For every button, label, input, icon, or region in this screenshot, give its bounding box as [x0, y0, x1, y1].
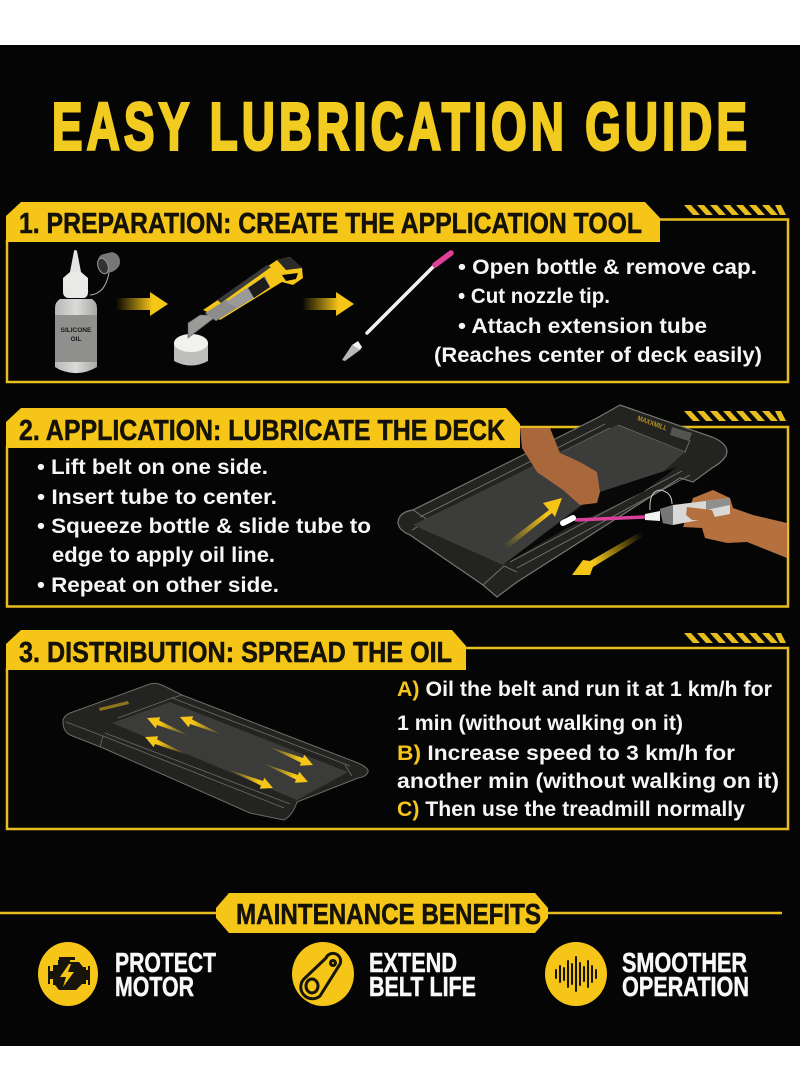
label	[369, 947, 476, 1002]
icon: belt and rollers	[292, 942, 354, 1006]
icon: extension tube and nozzle tip	[342, 253, 451, 361]
step 3 instructions: C) Then use the treadmill normally	[397, 798, 745, 821]
icon: silicone oil bottle: OIL	[71, 336, 81, 343]
panel 3 frame	[7, 648, 788, 829]
panel 1 frame	[7, 220, 788, 382]
panel 2 frame	[7, 427, 788, 606]
benefit: extend belt life	[292, 942, 476, 1006]
benefit: smoother operation	[545, 942, 749, 1006]
right hand	[683, 490, 787, 558]
step 2 instructions: • Insert tube to center.	[37, 486, 277, 509]
step 2 instructions: edge to apply oil line.	[52, 544, 275, 567]
step 2 instructions: • Repeat on other side.	[37, 574, 279, 597]
benefit: protect motor	[38, 942, 216, 1006]
label: BELT LIFE	[369, 971, 476, 1002]
step 1 instructions: • Open bottle & remove cap.	[458, 256, 757, 279]
brand on console	[99, 701, 129, 711]
section: maintenance benefits	[0, 893, 782, 1006]
hazard stripes	[684, 411, 786, 421]
oil bottle in hand	[660, 498, 730, 525]
arrows to the rear	[145, 716, 223, 755]
label: EXTEND	[369, 947, 457, 978]
benefits heading badge: MAINTENANCE BENEFITS	[236, 899, 541, 931]
icon: sound wave	[545, 942, 607, 1006]
step 3 instructions: 1 min (without walking on it)	[397, 712, 683, 735]
step 1 instructions: • Cut nozzle tip.	[458, 285, 610, 308]
lifted belt shadow	[503, 467, 677, 565]
illustration: treadmill with spreading arrows	[63, 683, 368, 820]
panel: step 2 application	[6, 405, 788, 606]
brand on console	[636, 415, 692, 441]
illustration: treadmill with lifted belt	[398, 405, 787, 597]
arrow	[116, 292, 168, 316]
arrow	[302, 292, 354, 316]
panel 2 heading tab: 2. APPLICATION: LUBRICATE THE DECK	[19, 415, 505, 447]
applicator tube	[575, 517, 645, 520]
step 2 instructions	[37, 456, 371, 597]
hazard stripes	[684, 205, 786, 215]
treadmill belt	[413, 425, 685, 565]
step 1 instructions	[434, 256, 762, 367]
panel: step 3 distribution	[6, 630, 788, 829]
label	[622, 947, 749, 1002]
icon: silicone oil bottle	[55, 250, 120, 373]
hazard stripes	[684, 633, 786, 643]
step 1 instructions: • Attach extension tube	[458, 315, 707, 338]
arrows to the front	[227, 746, 313, 789]
label: OPERATION	[622, 971, 749, 1002]
icon: silicone oil bottle: SILICONE	[61, 327, 92, 334]
step 3 instructions: A) Oil the belt and run it at 1 km/h for	[397, 678, 772, 701]
step 2 instructions: • Lift belt on one side.	[37, 456, 268, 479]
rails	[412, 424, 690, 585]
treadmill body	[398, 405, 727, 597]
panel 3 heading tab: 3. DISTRIBUTION: SPREAD THE OIL	[19, 637, 452, 669]
thumb	[686, 507, 716, 520]
label: SMOOTHER	[622, 947, 747, 978]
title: EASY LUBRICATION GUIDE	[52, 90, 747, 165]
treadmill belt	[112, 702, 348, 800]
panel 1 heading tab: 1. PREPARATION: CREATE THE APPLICATION TOOL	[19, 208, 642, 240]
cap cord	[650, 490, 672, 510]
step 3 instructions: another min (without walking on it)	[397, 770, 779, 793]
treadmill body	[63, 683, 368, 820]
yellow arrow up	[503, 498, 562, 549]
label	[115, 947, 216, 1002]
benefits heading badge	[0, 893, 782, 933]
panel: step 1 preparation	[6, 202, 788, 382]
step 3 instructions	[397, 678, 779, 821]
step 2 instructions: • Squeeze bottle & slide tube to	[37, 515, 371, 538]
rails	[66, 695, 352, 808]
left hand	[520, 428, 600, 505]
icon: engine	[38, 942, 98, 1006]
icon: utility knife cutting nozzle	[174, 257, 303, 366]
label: MOTOR	[115, 971, 194, 1002]
step 3 instructions: B) Increase speed to 3 km/h for	[397, 742, 735, 765]
yellow arrow down	[572, 531, 644, 575]
label: PROTECT	[115, 947, 216, 978]
brand on console: MAXXMILL	[636, 415, 668, 433]
step 1 instructions: (Reaches center of deck easily)	[434, 344, 762, 367]
